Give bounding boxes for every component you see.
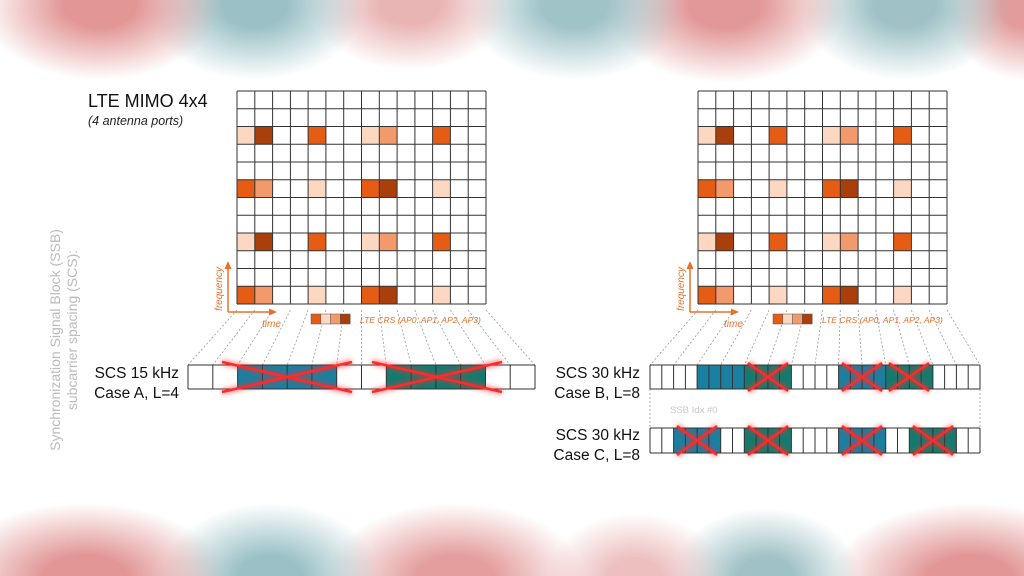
axes and legend left <box>214 261 481 330</box>
vertical side label <box>47 229 80 451</box>
background bottom band <box>0 466 1024 576</box>
vertical side label: Synchronization Signal Block (SSB) <box>47 229 63 451</box>
title: LTE MIMO 4x4: LTE MIMO 4x4 <box>88 91 208 111</box>
label: SCS 15 kHz Case A: Case A, L=4 <box>94 385 179 402</box>
title: LTE MIMO 4x4: (4 antenna ports) <box>88 114 183 128</box>
dashed projection lines right <box>650 310 980 428</box>
LTE resource grid right <box>698 91 947 304</box>
dashed projection lines left <box>188 310 535 365</box>
label: SCS 30 kHz Case B: SCS 30 kHz <box>556 365 640 382</box>
red cross marks <box>748 363 929 391</box>
SSB row: Case C <box>650 426 980 455</box>
label: SCS 30 kHz Case B: Case B, L=8 <box>554 385 640 402</box>
title: LTE MIMO 4x4 <box>88 91 208 128</box>
vertical side label: subcarrier spacing (SCS): <box>64 250 80 410</box>
label: SCS 15 kHz Case A <box>94 365 179 402</box>
axes and legend right <box>676 261 943 330</box>
SSB row: Case A <box>188 362 535 392</box>
red cross marks <box>222 362 502 392</box>
label: SCS 30 kHz Case C <box>553 427 640 464</box>
SSB row: Case B <box>650 363 980 391</box>
background top band <box>0 0 1024 100</box>
label: SCS 30 kHz Case C: SCS 30 kHz <box>556 427 640 444</box>
label: SCS 30 kHz Case C: Case C, L=8 <box>553 447 640 464</box>
LTE resource grid left <box>237 91 486 304</box>
SSB index label: SSB Idx #0 <box>670 405 718 416</box>
red cross marks <box>677 426 953 455</box>
label: SCS 30 kHz Case B <box>554 365 640 402</box>
label: SCS 15 kHz Case A: SCS 15 kHz <box>95 365 179 382</box>
